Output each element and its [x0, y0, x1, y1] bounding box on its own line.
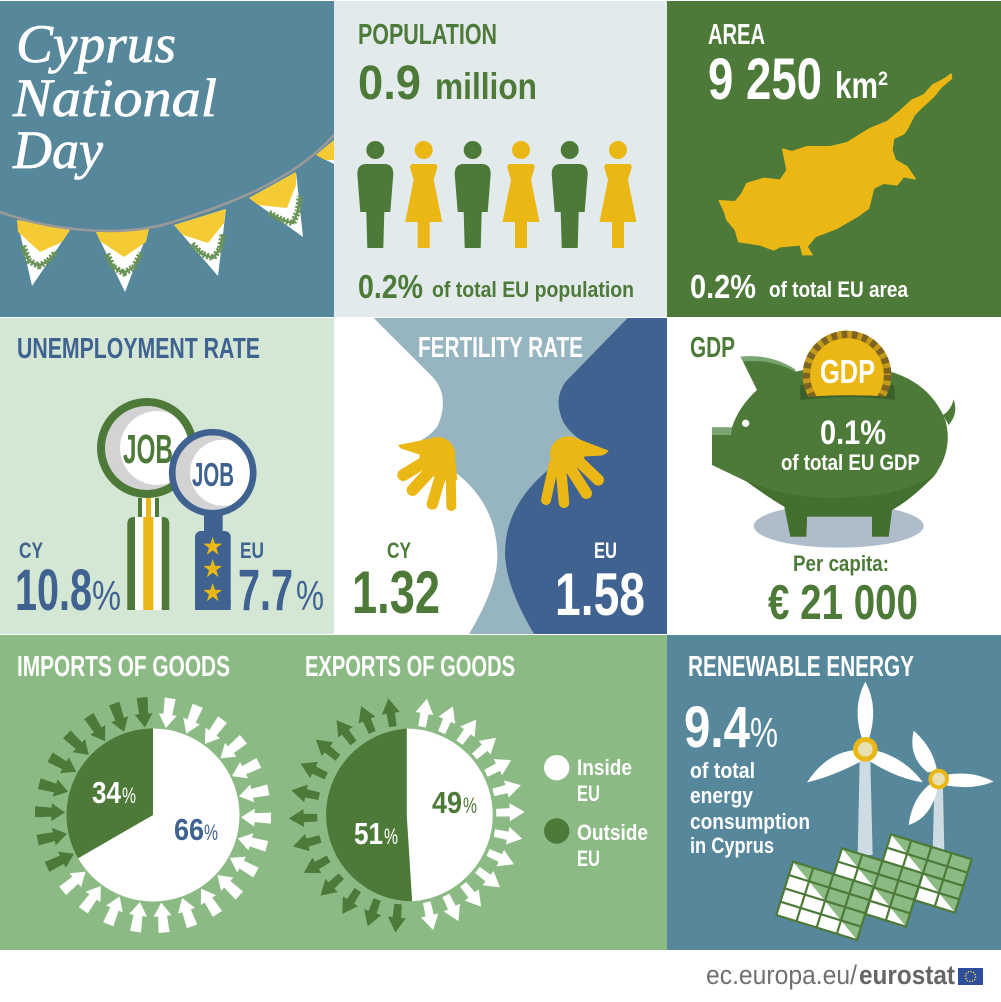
GDP share [781, 414, 920, 475]
value: imports inside EU: 66 [174, 812, 204, 847]
value: CY fertility: 1.32 [352, 559, 440, 626]
value: CY unemployment: CY [19, 538, 43, 563]
value: exports outside EU: 51 [354, 816, 383, 851]
panel: title [0, 1, 334, 317]
icon: solar panels [776, 834, 972, 940]
area share [690, 268, 909, 305]
renewable description: energy [690, 783, 754, 808]
heading: area: AREA [708, 19, 765, 51]
map: Cyprus [719, 74, 952, 255]
legend: Outside [577, 820, 648, 845]
heading: fertility rate: FERTILITY RATE [418, 332, 583, 364]
value: exports inside EU: % [463, 793, 477, 818]
area value: 2 [878, 69, 888, 90]
panel: unemployment rate [0, 318, 334, 634]
icon: piggy bank [712, 334, 955, 548]
heading: imports: IMPORTS OF GOODS [17, 651, 230, 683]
population share [358, 268, 634, 305]
area value: km [835, 65, 878, 106]
value: EU unemployment: % [296, 572, 324, 619]
renewable value: 9.4 [684, 695, 750, 760]
GDP share: of total EU GDP [781, 450, 920, 475]
arrows: imports inside EU [57, 697, 271, 933]
title [12, 14, 217, 180]
population value: 0.9 [358, 57, 421, 110]
title: Cyprus [16, 14, 176, 74]
per capita: € 21 000 [768, 576, 918, 630]
panel: trade [0, 635, 667, 950]
heading: exports: EXPORTS OF GOODS [305, 651, 515, 683]
legend: EU [577, 846, 600, 871]
population value [358, 57, 537, 110]
arrows: exports outside EU [288, 697, 407, 933]
arrows: imports outside EU [35, 697, 154, 875]
icon: EU flag [958, 968, 983, 985]
population share: of total EU population [432, 277, 634, 302]
arrows: exports inside EU [413, 697, 525, 932]
value: exports outside EU: % [384, 824, 398, 849]
footer: source: ec.europa.eu/ [706, 960, 858, 990]
icon: wind turbines [807, 682, 994, 855]
value: CY fertility: CY [387, 538, 411, 563]
value: exports inside EU: 49 [432, 785, 462, 820]
per capita [768, 551, 918, 630]
GDP share: 0.1% [820, 414, 886, 452]
renewable value: % [750, 709, 778, 756]
title: National [12, 68, 217, 128]
icon: blue magnifier EU [172, 432, 256, 610]
value: EU fertility: EU [594, 538, 617, 563]
renewable description: consumption [690, 809, 810, 834]
legend: Inside [577, 755, 632, 780]
area share: of total EU area [769, 277, 909, 302]
coin label: GDP [820, 353, 875, 390]
renewable description [690, 758, 810, 858]
renewable description: in Cyprus [690, 833, 774, 858]
panel: renewable energy [667, 635, 1001, 950]
chart: imports [35, 697, 271, 933]
value: imports outside EU: % [122, 783, 136, 808]
icon: people row [357, 141, 636, 248]
value: EU fertility: 1.58 [555, 561, 645, 628]
chart: exports [288, 697, 525, 933]
value: EU fertility [555, 538, 645, 628]
value: imports outside EU: 34 [92, 775, 122, 810]
value: CY unemployment: 10.8 [15, 558, 92, 623]
icon: green magnifier CY [101, 402, 194, 610]
footer: source: eurostat [859, 960, 955, 990]
value: imports inside EU: % [204, 820, 218, 845]
icon: blue magnifier EU: JOB [192, 456, 234, 493]
population value: million [435, 66, 537, 107]
legend: EU [577, 781, 600, 806]
panel: fertility rate [334, 318, 668, 634]
pie: exports [326, 728, 493, 901]
area share: 0.2% [690, 268, 756, 305]
panel: area [667, 1, 1001, 317]
per capita: Per capita: [793, 551, 889, 576]
heading: population: POPULATION [358, 19, 497, 51]
value: CY fertility [352, 538, 440, 626]
legend [544, 755, 648, 871]
heading: GDP: GDP [690, 332, 735, 364]
pie: imports [67, 728, 240, 901]
heading: renewable energy: RENEWABLE ENERGY [688, 651, 914, 683]
renewable description: of total [690, 758, 755, 783]
icon: green magnifier CY: JOB [123, 426, 173, 472]
population share: 0.2% [358, 268, 423, 305]
value: EU unemployment: EU [240, 538, 264, 563]
value: EU unemployment: 7.7 [238, 558, 293, 623]
area value: 9 250 [708, 47, 822, 112]
title: Day [12, 120, 103, 180]
footer: source [706, 960, 983, 990]
heading: unemployment rate: UNEMPLOYMENT RATE [17, 333, 260, 365]
icon: bunting flags [0, 135, 334, 292]
panel: population [334, 1, 667, 317]
panel: GDP [667, 318, 956, 634]
figure: silhouettes and hands [334, 318, 668, 634]
value: CY unemployment: % [92, 572, 121, 619]
